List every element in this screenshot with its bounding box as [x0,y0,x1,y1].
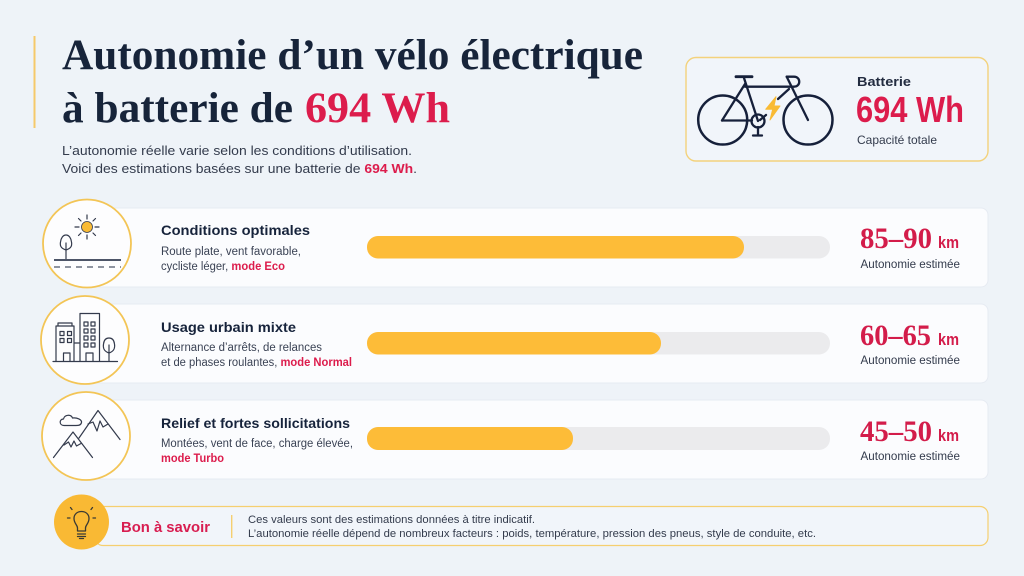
title accent line [34,36,36,128]
row text: Conditions optimales [161,222,310,238]
panel: hills and heavy load [42,392,988,480]
bar: 85–90 km [367,236,830,258]
subtitle: L’autonomie réelle varie selon les conditions d’utilisation. [62,143,412,158]
panel: battery [686,58,988,161]
title: 694 Wh [305,85,450,132]
row text [161,415,353,465]
value: 85–90 km: Autonomie estimée [860,259,960,271]
value: 85–90 km [860,222,960,271]
panel: good to know [54,494,988,550]
note text: Ces valeurs sont des estimations données à titre indicatif. [248,514,535,526]
row text [161,319,352,369]
value: 60–65 km: 60–65 [860,319,931,352]
icon: city buildings [41,296,129,384]
bar: 45–50 km [367,427,830,450]
panel: battery: 694 Wh [856,89,964,130]
value: 85–90 km: 85–90 [860,222,932,255]
panel: optimal conditions [43,200,988,288]
value: 45–50 km: Autonomie estimée [860,451,960,463]
icon: sun, tree and road [43,200,131,288]
value: 60–65 km: km [938,331,959,349]
icon: light bulb [54,494,109,550]
subtitle [62,143,417,176]
note text: L’autonomie réelle dépend de nombreux facteurs : poids, température, pression des pneus, style de conduite, etc. [248,528,816,540]
value: 60–65 km [860,319,960,367]
row text: Route plate, vent favorable, [161,246,301,258]
icon: mountains and cloud [42,392,130,480]
value: 45–50 km [860,415,960,463]
row text: Relief et fortes sollicitations [161,415,350,431]
panel: battery: Batterie [857,75,911,89]
value: 85–90 km: km [938,234,959,252]
value: 45–50 km: 45–50 [860,415,932,448]
note text [248,514,816,540]
title: à batterie de [62,85,293,132]
value: 60–65 km: Autonomie estimée [860,355,960,367]
row text [161,222,310,273]
title [62,32,643,132]
subtitle: Voici des estimations basées sur une batterie de 694 Wh. [62,161,417,176]
row text: Usage urbain mixte [161,319,296,335]
title: Autonomie d’un vélo électrique [62,32,643,79]
row text: Montées, vent de face, charge élevée, [161,438,353,450]
row text: et de phases roulantes, mode Normal [161,357,352,369]
row text: cycliste léger, mode Eco [161,261,285,273]
row text: Alternance d’arrêts, de relances [161,342,322,354]
icon: electric bicycle [698,77,832,144]
label: Bon à savoir: Bon à savoir [121,519,210,536]
bar: 60–65 km [367,332,830,354]
panel: battery: Capacité totale [857,133,937,147]
row text: mode Turbo [161,453,224,465]
panel: mixed urban use [41,296,988,384]
value: 45–50 km: km [938,427,959,445]
